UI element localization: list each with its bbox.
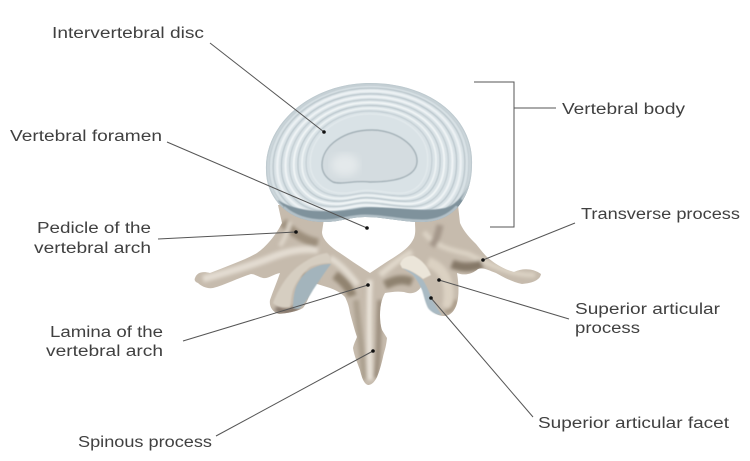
right articular process cap: [400, 256, 431, 279]
label: superior articular process: process: [575, 320, 640, 337]
annulus rings: [269, 85, 469, 220]
label: vertebral foramen: Vertebral foramen: [10, 128, 162, 145]
left articular facet: [293, 264, 331, 309]
nucleus pulposus: [322, 130, 417, 183]
left articular process cap: [273, 253, 331, 307]
label: vertebral body: Vertebral body: [562, 101, 685, 118]
label: lamina of the vertebral arch: Lamina of the: [50, 324, 163, 341]
leader lines: [158, 43, 575, 436]
illustration: lumbar vertebra: [195, 83, 541, 385]
label: pedicle of the vertebral arch: Pedicle of the: [37, 220, 151, 237]
label: pedicle of the vertebral arch: vertebral arch: [34, 240, 151, 257]
label: lamina of the vertebral arch: vertebral arch: [46, 343, 163, 360]
vertebral arch bone: [195, 205, 541, 385]
intervertebral disc: [266, 83, 474, 226]
outer soft edge: [266, 83, 472, 208]
label: transverse process: Transverse process: [581, 206, 740, 223]
dark inferior band: [278, 184, 470, 222]
right articular facet: [402, 267, 442, 315]
label: intervertebral disc: Intervertebral disc: [52, 25, 204, 42]
bracket: vertebral body: [474, 82, 556, 227]
lighter lower strip: [283, 207, 458, 222]
label: spinous process: Spinous process: [78, 434, 212, 451]
label: superior articular facet: Superior articular facet: [538, 415, 730, 432]
label: superior articular process: Superior articular: [575, 301, 720, 318]
